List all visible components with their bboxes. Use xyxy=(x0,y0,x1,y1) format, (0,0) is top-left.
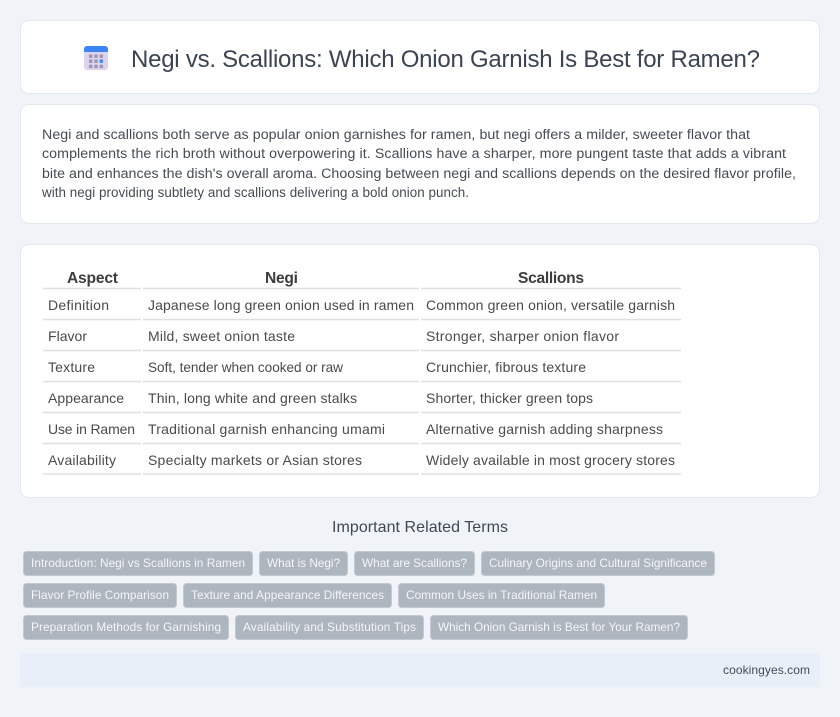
tag xyxy=(184,584,392,608)
icon: calendar xyxy=(84,46,108,70)
table row: flavor: Flavor xyxy=(48,328,87,344)
table row: appearance: Appearance xyxy=(48,390,124,406)
table row: use in ramen: Use in Ramen xyxy=(48,421,135,437)
panel: introduction xyxy=(20,104,820,224)
tag xyxy=(24,552,252,576)
table row: flavor xyxy=(48,328,619,344)
table row: use in ramen xyxy=(48,421,663,437)
table row: availability: Specialty markets or Asian stores xyxy=(148,452,362,468)
footer credit: cookingyes.com xyxy=(723,663,810,677)
tags: related terms xyxy=(24,552,714,640)
tag xyxy=(430,616,688,640)
table header: Negi xyxy=(265,270,298,287)
tag xyxy=(24,584,176,608)
table row: availability: Availability xyxy=(48,452,116,468)
tag: What is Negi? xyxy=(267,556,340,570)
tag: Flavor Profile Comparison xyxy=(31,588,169,602)
table row: texture: Soft, tender when cooked or raw xyxy=(148,360,343,375)
tag: Availability and Substitution Tips xyxy=(243,620,416,634)
text block: introduction xyxy=(41,127,796,200)
table row: definition xyxy=(48,297,675,313)
text block: introduction: bite and enhances the dish's overall aroma. Choosing between negi and scallions depends on the desired flavor profile, xyxy=(42,166,796,182)
table row: texture xyxy=(48,359,586,375)
table header xyxy=(67,270,584,287)
tag: Which Onion Garnish is Best for Your Ramen? xyxy=(438,620,680,634)
table header: Scallions xyxy=(518,270,584,287)
tag: Common Uses in Traditional Ramen xyxy=(406,588,597,602)
tag: What are Scallions? xyxy=(362,556,467,570)
table row: definition: Definition xyxy=(48,297,109,313)
tag xyxy=(398,584,604,608)
tag xyxy=(260,552,348,576)
panel: header xyxy=(20,20,820,94)
panel: comparison table xyxy=(20,244,820,498)
tag: Culinary Origins and Cultural Significance xyxy=(489,556,707,570)
table header: Aspect xyxy=(67,270,118,287)
heading: important related terms: Important Related Terms xyxy=(332,519,508,536)
tag xyxy=(24,616,228,640)
table row: flavor: Stronger, sharper onion flavor xyxy=(426,328,619,344)
table row: definition: Japanese long green onion used in ramen xyxy=(148,297,414,313)
tag xyxy=(482,552,714,576)
tag: Introduction: Negi vs Scallions in Ramen xyxy=(31,556,245,570)
tag: Preparation Methods for Garnishing xyxy=(31,620,221,634)
table row: texture: Crunchier, fibrous texture xyxy=(426,359,586,375)
table row: definition: Common green onion, versatile garnish xyxy=(426,297,675,313)
tag xyxy=(354,552,474,576)
table row: availability xyxy=(48,452,675,468)
table row: texture: Texture xyxy=(48,359,95,375)
table row: availability: Widely available in most grocery stores xyxy=(426,452,675,468)
footer xyxy=(20,653,820,687)
table row: appearance xyxy=(48,390,593,406)
title: Negi vs. Scallions: Which Onion Garnish Is Best for Ramen? xyxy=(131,46,760,73)
text block: introduction: with negi providing subtlety and scallions delivering a bold onion punch. xyxy=(41,185,469,200)
table row: use in ramen: Traditional garnish enhancing umami xyxy=(148,421,385,437)
table row: use in ramen: Alternative garnish adding sharpness xyxy=(426,421,663,437)
tag xyxy=(236,616,424,640)
tag: Texture and Appearance Differences xyxy=(191,588,384,602)
table row: appearance: Shorter, thicker green tops xyxy=(426,390,593,406)
table row: flavor: Mild, sweet onion taste xyxy=(148,328,295,344)
text block: introduction: complements the rich broth without overpowering it. Scallions have a sharper, more pungent taste that adds a vibrant xyxy=(42,146,786,162)
text block: introduction: Negi and scallions both serve as popular onion garnishes for ramen, but negi offers a milder, sweeter flavor that xyxy=(42,127,750,143)
table row: appearance: Thin, long white and green stalks xyxy=(148,390,357,406)
